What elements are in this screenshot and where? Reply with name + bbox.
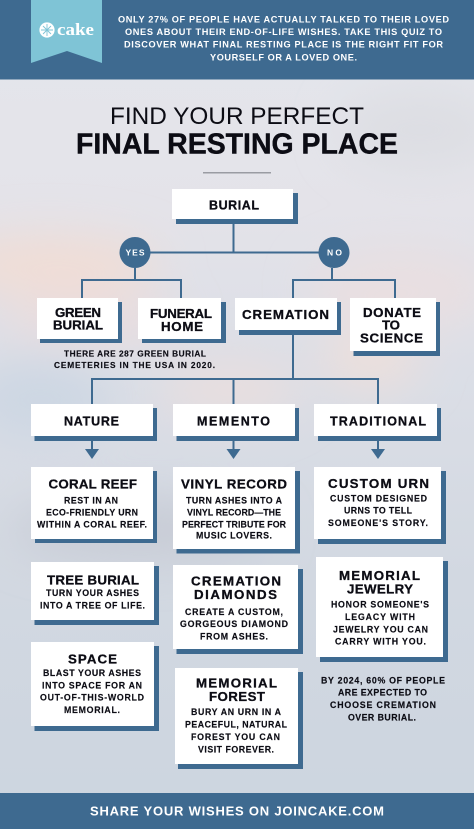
category: nature: NATURE bbox=[64, 414, 119, 428]
card: memorial forest: BURY AN URN IN A bbox=[191, 707, 282, 717]
card: memorial jewelry: LEGACY WITH bbox=[345, 612, 415, 622]
card: space: OUT-OF-THIS-WORLD bbox=[40, 693, 144, 703]
node: green burial: BURIAL bbox=[53, 318, 103, 333]
card: tree burial: TREE BURIAL bbox=[47, 572, 139, 587]
node: yes bbox=[120, 237, 150, 268]
connectors: flowchart lines bbox=[82, 222, 395, 450]
arrow: memento bbox=[226, 449, 240, 459]
title: FINAL RESTING PLACE bbox=[76, 129, 398, 161]
card: custom urn: URNS TO TELL bbox=[344, 506, 413, 516]
card: space: SPACE bbox=[68, 651, 117, 666]
card: memorial jewelry: JEWELRY YOU CAN bbox=[333, 624, 428, 634]
card: memorial forest: FOREST bbox=[209, 689, 265, 704]
node: no: NO bbox=[327, 248, 342, 258]
node: green burial: GREEN bbox=[55, 305, 101, 320]
footer banner: SHARE YOUR WISHES ON JOINCAKE.COM bbox=[90, 803, 384, 818]
category: nature bbox=[31, 404, 157, 441]
card: memorial jewelry: MEMORIAL bbox=[339, 568, 420, 583]
note: cremation statistic: CHOOSE CREMATION bbox=[330, 700, 436, 710]
node: cremation: CREMATION bbox=[242, 307, 329, 322]
icon: cake flower bbox=[39, 22, 55, 38]
header intro text bbox=[118, 14, 449, 62]
card: memorial forest: FOREST YOU CAN bbox=[191, 732, 280, 742]
node: cremation bbox=[235, 298, 341, 335]
card: vinyl record bbox=[173, 467, 300, 554]
card: memorial jewelry bbox=[316, 557, 448, 662]
card: custom urn: CUSTOM URN bbox=[328, 476, 429, 491]
card: tree burial bbox=[31, 562, 159, 625]
header intro text: ONLY 27% OF PEOPLE HAVE ACTUALLY TALKED TO THEIR LOVED bbox=[118, 14, 449, 24]
title bbox=[76, 103, 398, 161]
card: cremation diamonds: GORGEOUS DIAMOND bbox=[180, 619, 288, 629]
category: traditional bbox=[314, 404, 441, 441]
node: donate to science: TO bbox=[382, 318, 400, 333]
node: donate to science: SCIENCE bbox=[360, 331, 423, 346]
card: cremation diamonds: CREMATION bbox=[191, 574, 281, 589]
card: memorial forest: VISIT FOREVER. bbox=[198, 744, 274, 754]
note: cremation statistic: OVER BURIAL. bbox=[348, 712, 416, 722]
title: FIND YOUR PERFECT bbox=[110, 103, 364, 130]
node: funeral home: HOME bbox=[161, 319, 203, 334]
card: coral reef: REST IN AN bbox=[64, 495, 118, 505]
card: vinyl record: VINYL RECORD bbox=[181, 477, 287, 492]
node: funeral home: FUNERAL bbox=[150, 306, 212, 321]
node: no bbox=[318, 237, 350, 268]
card: coral reef: CORAL REEF bbox=[48, 477, 137, 492]
card: custom urn bbox=[314, 467, 446, 544]
card: tree burial: TURN YOUR ASHES bbox=[46, 588, 139, 598]
ribbon logo: cake bbox=[57, 20, 95, 39]
arrow: nature bbox=[85, 449, 99, 459]
node: donate to science: DONATE bbox=[363, 305, 421, 320]
card: cremation diamonds bbox=[173, 565, 303, 654]
card: memorial forest bbox=[175, 668, 303, 769]
note: green burial cemeteries: THERE ARE 287 GREEN BURIAL bbox=[64, 348, 206, 358]
card: custom urn: CUSTOM DESIGNED bbox=[330, 493, 427, 503]
card: vinyl record: MUSIC LOVERS. bbox=[196, 531, 272, 541]
category: memento bbox=[173, 404, 299, 441]
header banner bbox=[0, 0, 474, 80]
card: memorial jewelry: CARRY WITH YOU. bbox=[335, 637, 426, 647]
card: space: INTO SPACE FOR AN bbox=[42, 681, 142, 691]
card: tree burial: INTO A TREE OF LIFE. bbox=[40, 601, 145, 611]
note: cremation statistic bbox=[321, 675, 445, 722]
card: memorial jewelry: HONOR SOMEONE'S bbox=[331, 600, 429, 610]
card: space bbox=[31, 642, 159, 731]
card: cremation diamonds: FROM ASHES. bbox=[200, 632, 268, 642]
card: vinyl record: VINYL RECORD—THE bbox=[187, 507, 281, 517]
header intro text: YOURSELF OR A LOVED ONE. bbox=[210, 52, 357, 62]
card: space: BLAST YOUR ASHES bbox=[43, 668, 141, 678]
ribbon logo bbox=[31, 0, 102, 63]
category: memento: MEMENTO bbox=[197, 414, 270, 428]
note: cremation statistic: ARE EXPECTED TO bbox=[338, 688, 427, 698]
card: cremation diamonds: CREATE A CUSTOM, bbox=[185, 607, 283, 617]
card: coral reef: ECO-FRIENDLY URN bbox=[46, 507, 138, 517]
node: burial: BURIAL bbox=[209, 198, 259, 212]
card: memorial forest: PEACEFUL, NATURAL bbox=[185, 720, 288, 730]
node: green burial bbox=[37, 298, 122, 343]
header intro text: ONES ABOUT THEIR END-OF-LIFE WISHES. TAKE THIS QUIZ TO bbox=[125, 27, 442, 37]
card: memorial forest: MEMORIAL bbox=[196, 676, 277, 691]
arrow: traditional bbox=[371, 449, 385, 459]
card: vinyl record: TURN ASHES INTO A bbox=[186, 495, 283, 505]
node: burial bbox=[172, 189, 298, 224]
note: green burial cemeteries: CEMETERIES IN THE USA IN 2020. bbox=[54, 360, 215, 370]
note: green burial cemeteries bbox=[54, 348, 215, 370]
card: custom urn: SOMEONE'S STORY. bbox=[328, 518, 428, 528]
node: donate to science bbox=[350, 298, 440, 356]
card: space: MEMORIAL. bbox=[64, 705, 120, 715]
card: cremation diamonds: DIAMONDS bbox=[194, 587, 277, 602]
category: traditional: TRADITIONAL bbox=[330, 414, 426, 428]
footer banner bbox=[0, 793, 474, 829]
node: yes: YES bbox=[126, 248, 145, 258]
note: cremation statistic: BY 2024, 60% OF PEOPLE bbox=[321, 675, 445, 685]
card: memorial jewelry: JEWELRY bbox=[347, 581, 413, 596]
header intro text: DISCOVER WHAT FINAL RESTING PLACE IS THE RIGHT FIT FOR bbox=[124, 40, 443, 50]
card: coral reef: WITHIN A CORAL REEF. bbox=[37, 519, 147, 529]
card: vinyl record: PERFECT TRIBUTE FOR bbox=[182, 519, 287, 529]
node: funeral home bbox=[138, 298, 226, 343]
card: coral reef bbox=[31, 467, 157, 543]
